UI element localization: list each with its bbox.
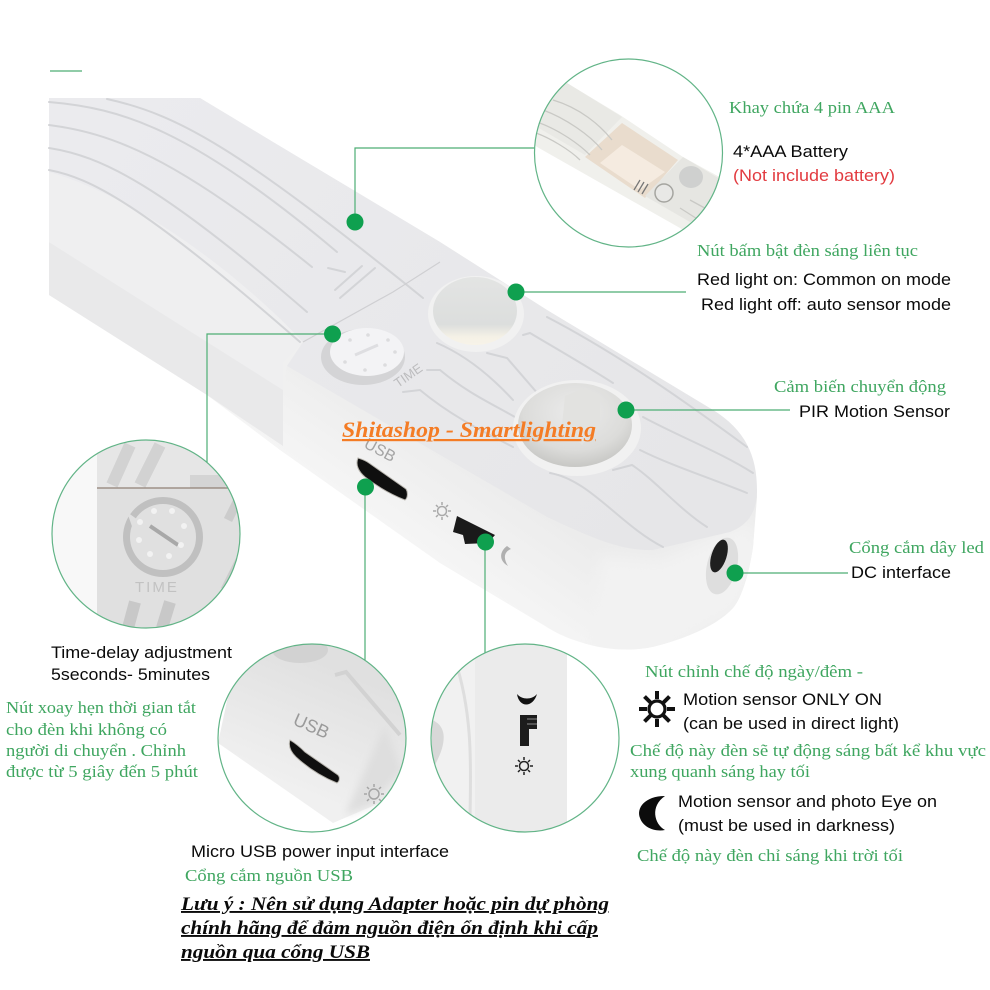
text: timer note: được từ 5 giây đến 5 phút <box>6 762 198 781</box>
ridges on long section <box>49 99 440 342</box>
text: PIR sensor: PIR Motion Sensor <box>799 403 951 421</box>
panel: battery tray circle <box>530 59 725 247</box>
time dial <box>321 328 425 390</box>
panel: time dial circle: TIME <box>135 579 179 596</box>
text: PIR sensor <box>774 377 951 421</box>
text: timer note <box>6 698 198 781</box>
callout: button line <box>516 291 686 293</box>
top face of device <box>49 98 757 550</box>
marker dots <box>324 214 744 582</box>
short green rule <box>50 70 82 72</box>
text: battery <box>729 98 896 185</box>
sun mark on device <box>433 502 451 520</box>
text: timer note: người di chuyển . Chỉnh <box>6 741 187 760</box>
text: warning note <box>180 894 609 963</box>
text: moon mode: Chế độ này đèn chỉ sáng khi trời tối <box>637 846 903 865</box>
device body silhouette <box>49 98 757 650</box>
moon mark on device <box>501 546 511 566</box>
callout: battery tray line <box>355 148 536 222</box>
panel: USB port circle: USB <box>290 709 332 743</box>
text: timer note: cho đèn khi không có <box>6 720 167 739</box>
panel: time dial circle <box>52 440 242 628</box>
text: warning note: nguồn qua cổng USB <box>181 942 370 963</box>
watermark: Shitashop - Smartlighting <box>342 417 596 442</box>
text: moon mode: Motion sensor and photo Eye on <box>678 793 937 811</box>
text: time-delay: Time-delay adjustment <box>51 644 232 662</box>
text: button: Nút bấm bật đèn sáng liên tục <box>697 241 918 260</box>
callout: DC line <box>735 572 848 574</box>
text: moon mode: (must be used in darkness) <box>678 817 895 835</box>
text: sun mode: xung quanh sáng hay tối <box>630 762 810 781</box>
USB label on device: USB <box>361 436 398 466</box>
ridges on sensor head <box>403 317 753 547</box>
callout: switch line <box>484 542 486 654</box>
text: button: Red light off: auto sensor mode <box>701 296 951 314</box>
text: USB <box>185 843 449 885</box>
lighter soft edge <box>49 172 303 390</box>
icon: moon <box>639 796 665 830</box>
callout: USB line <box>364 487 366 664</box>
DC socket <box>700 534 744 598</box>
panel: mode switch circle <box>430 640 619 840</box>
time dial: TIME <box>391 360 425 390</box>
panel: USB port circle <box>218 637 410 832</box>
text: warning note: Lưu ý : Nên sử dụng Adapter hoặc pin dự phòng <box>180 894 609 915</box>
text: battery: Khay chứa 4 pin AAA <box>729 98 896 117</box>
soft shading on end cap <box>590 520 770 655</box>
PIR sensor dome <box>513 380 641 476</box>
text: sun mode: Motion sensor ONLY ON <box>683 691 882 709</box>
callout: PIR line <box>626 409 790 411</box>
left side strip <box>49 242 283 446</box>
text: time-delay: 5seconds- 5minutes <box>51 666 210 684</box>
text: battery: (Not include battery) <box>733 167 895 185</box>
front panel corner <box>283 342 303 392</box>
USB port <box>357 458 407 500</box>
text: USB: Cổng cắm nguồn USB <box>185 866 353 885</box>
text: timer note: Nút xoay hẹn thời gian tắt <box>6 698 196 717</box>
text: warning note: chính hãng để đảm nguồn điện ổn định khi cấp <box>181 918 598 939</box>
icon: sun <box>639 691 675 727</box>
text: time-delay <box>51 644 232 684</box>
text: battery: 4*AAA Battery <box>733 143 849 161</box>
device photo <box>49 98 770 655</box>
text: DC interface <box>849 538 985 582</box>
text: DC interface: DC interface <box>851 564 951 582</box>
text: USB: Micro USB power input interface <box>191 843 449 861</box>
text: DC interface: Cổng cắm dây led <box>849 538 985 557</box>
text: button <box>697 241 951 314</box>
text: button: Red light on: Common on mode <box>697 271 951 289</box>
text: sun mode <box>630 691 986 781</box>
mode slide switch <box>453 516 495 544</box>
text: sun mode: Chế độ này đèn sẽ tự động sáng bất kể khu vực <box>630 741 986 760</box>
text: moon mode <box>637 793 937 865</box>
callout: dial line <box>207 334 332 463</box>
text: sun mode: (can be used in direct light) <box>683 715 899 733</box>
text: day night heading: Nút chỉnh chế độ ngày/đêm - <box>645 662 863 681</box>
text: PIR sensor: Cảm biến chuyển động <box>774 377 947 396</box>
light button <box>428 276 524 352</box>
